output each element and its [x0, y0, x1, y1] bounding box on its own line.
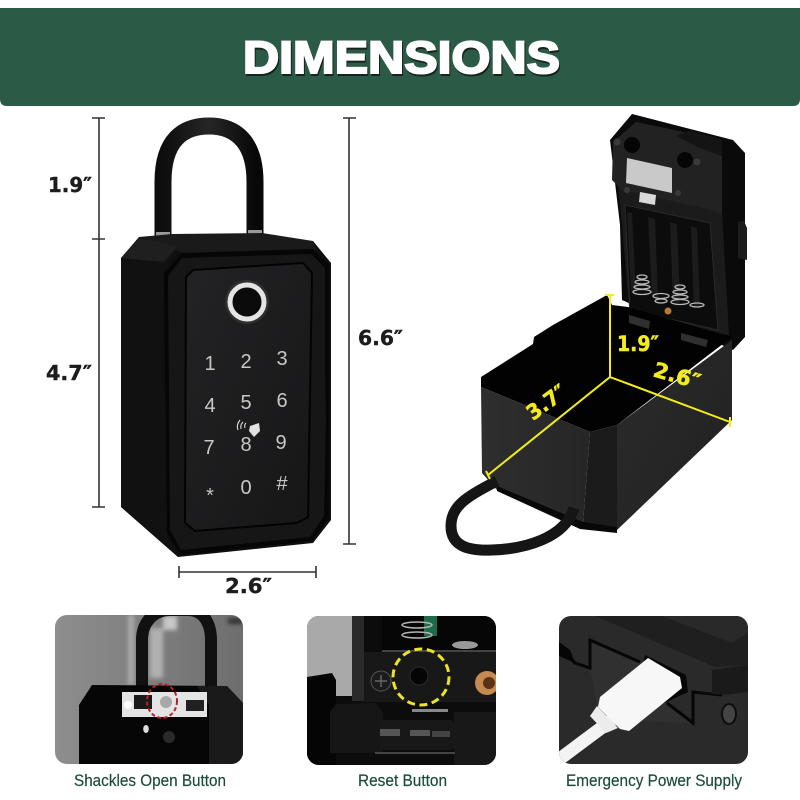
corner block — [703, 665, 748, 695]
hinge knuckles — [380, 720, 454, 750]
body plate — [364, 652, 496, 702]
lid back — [610, 114, 745, 350]
fingerprint reader — [225, 280, 269, 324]
dimension line: left height — [92, 118, 105, 507]
lid upper module — [612, 122, 722, 215]
yellow dashed circle — [393, 649, 449, 705]
notch shadows — [559, 640, 722, 723]
reset button — [410, 667, 428, 685]
hinges — [629, 315, 708, 347]
header banner — [0, 8, 800, 106]
measure lines — [486, 295, 730, 479]
white label — [626, 158, 672, 193]
small white dot — [143, 725, 149, 733]
keypad panel — [185, 263, 312, 531]
panel: shackles open button — [55, 610, 243, 770]
title: DIMENSIONS — [243, 32, 560, 83]
battery recess — [484, 616, 496, 628]
USB plug and cable — [553, 658, 682, 764]
spring and circuit — [402, 616, 437, 638]
keypad digits — [203, 348, 288, 507]
keypad digits: 6 — [276, 390, 288, 412]
battery springs — [633, 275, 704, 307]
caption: emergency power supply: Emergency Power Supply — [566, 771, 742, 790]
battery compartment — [625, 205, 718, 330]
brass insert — [475, 671, 496, 695]
label: interior length: 3.7″ — [522, 380, 572, 425]
label: shackle height: 1.9″ — [48, 173, 92, 197]
keypad digits: * — [206, 485, 214, 507]
lid plate — [618, 185, 729, 335]
screw — [163, 731, 175, 743]
button slot — [122, 692, 207, 717]
raised notch face — [590, 640, 693, 723]
screw — [722, 704, 736, 724]
open view lock — [451, 114, 747, 550]
label: interior height: 1.9″ — [617, 332, 659, 356]
dimension line: total height — [343, 118, 356, 544]
keypad digits: 4 — [204, 395, 216, 417]
front view lock — [121, 126, 331, 557]
title: DIMENSIONS — [244, 34, 561, 85]
left latch — [307, 673, 336, 765]
metal contact — [452, 641, 478, 649]
keypad digits: # — [276, 473, 288, 495]
lock body — [121, 237, 331, 557]
keypad digits: 7 — [203, 437, 215, 459]
blurred background object — [128, 615, 243, 685]
label: total height: 6.6″ — [358, 326, 403, 350]
dimension line: width — [179, 566, 316, 578]
USB port — [639, 192, 656, 205]
keypad digits: 5 — [240, 392, 252, 414]
keypad digits: 0 — [240, 477, 252, 499]
shackle collars — [156, 230, 262, 239]
keypad digits: 9 — [275, 432, 287, 454]
label: body height: 4.7″ — [46, 361, 92, 385]
label: interior width: 2.6″ — [651, 358, 703, 394]
red dashed circle — [147, 684, 177, 718]
hinge block — [330, 703, 383, 753]
caption: reset button: Reset Button — [358, 771, 447, 790]
box walls — [481, 387, 590, 523]
keypad digits: 3 — [276, 348, 288, 370]
keypad digits: 8 — [240, 434, 252, 456]
panel: reset button — [307, 616, 499, 765]
shackle — [163, 126, 255, 236]
icon: RFID card — [237, 420, 260, 437]
label: width: 2.6″ — [225, 574, 272, 598]
keypad digits: 2 — [240, 351, 252, 373]
lid right edge and clip — [738, 221, 747, 260]
top face — [595, 616, 748, 667]
box interior — [481, 295, 732, 432]
lock top — [79, 685, 243, 770]
screw — [371, 671, 391, 691]
panel: emergency power supply — [553, 616, 748, 764]
box shackle — [451, 481, 574, 550]
keypad digits: 1 — [204, 353, 216, 375]
plug socket shadow — [640, 655, 688, 705]
panel shackle — [142, 610, 211, 688]
caption: shackles open button: Shackles Open Button — [74, 771, 226, 790]
